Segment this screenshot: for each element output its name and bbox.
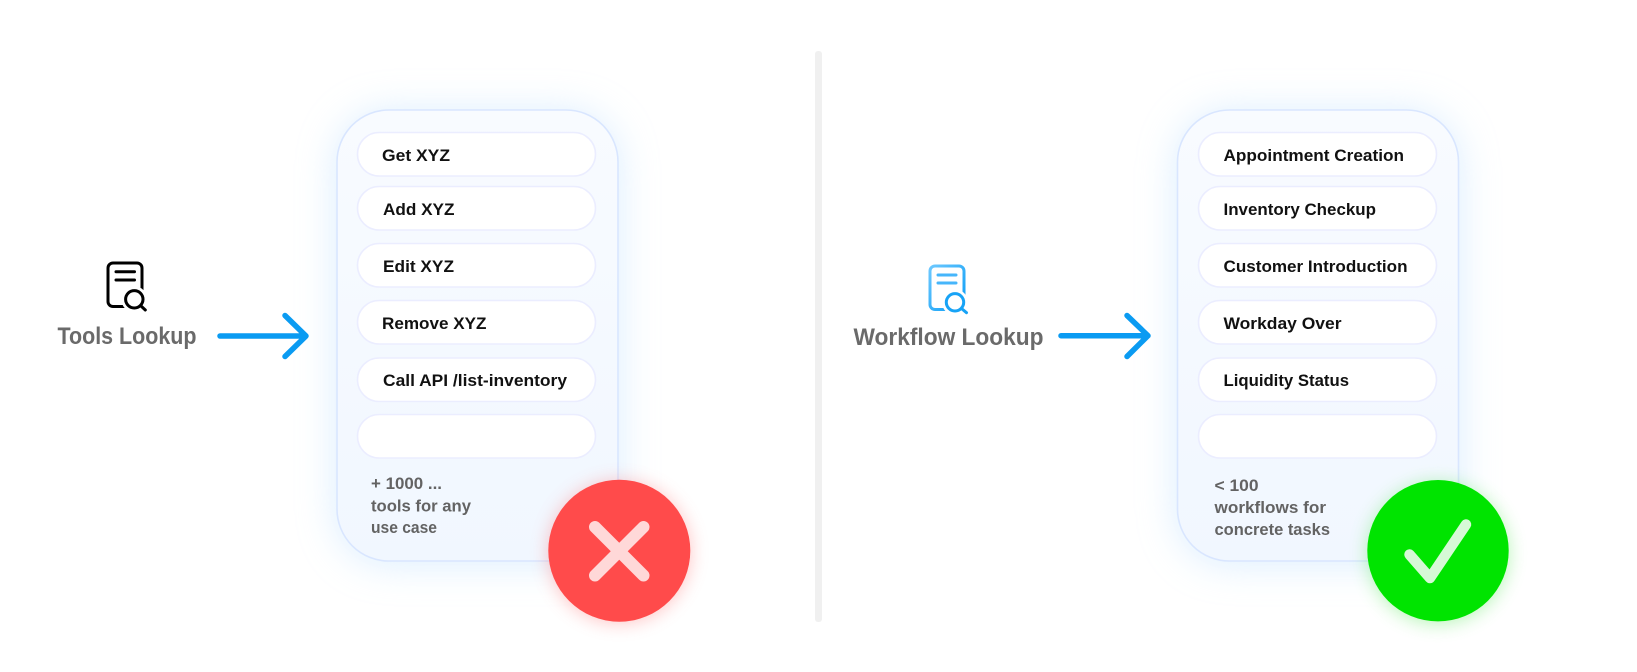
pill: Add XYZ (358, 186, 596, 230)
pill: Add XYZ: Add XYZ (383, 200, 454, 219)
caption: tools count: tools for any (371, 496, 472, 516)
pill: Call API (358, 358, 596, 402)
icon: workflow lookup document (930, 266, 968, 315)
pill: Inventory Checkup: Inventory Checkup (1224, 200, 1376, 219)
pill: Appointment Creation: Appointment Creation (1224, 146, 1404, 165)
workflow panel glow (1178, 112, 1458, 563)
tools panel glow (337, 112, 618, 563)
pill: Call API: Call API /list-inventory (383, 371, 568, 390)
badge: green check (1367, 480, 1509, 624)
pill: Inventory Checkup (1198, 186, 1436, 230)
pill: Remove XYZ: Remove XYZ (382, 314, 486, 333)
caption: tools count: + 1000 ... (371, 474, 442, 493)
pill: Customer Introduction: Customer Introduction (1224, 257, 1408, 276)
arrow: workflow (1061, 316, 1148, 356)
pill: empty (358, 414, 596, 458)
badge: red cross (548, 480, 690, 623)
pill: Edit XYZ (358, 244, 596, 287)
caption: workflow count: workflows for (1213, 498, 1326, 517)
arrow: tools (220, 316, 306, 356)
pill: Workday Over (1198, 300, 1436, 344)
panel: tools lookup (337, 110, 618, 563)
divider (815, 51, 822, 622)
heading: Tools Lookup: Tools Lookup (58, 323, 196, 350)
pill: Appointment Creation (1198, 132, 1436, 176)
heading: Workflow Lookup: Workflow Lookup (854, 324, 1044, 351)
pill: Edit XYZ: Edit XYZ (383, 257, 454, 276)
caption: tools count (371, 474, 472, 537)
workflow panel card (1178, 110, 1458, 561)
tools panel card (337, 110, 618, 561)
caption: workflow count (1213, 476, 1330, 539)
caption: workflow count: concrete tasks (1214, 520, 1330, 539)
pill: Liquidity Status: Liquidity Status (1224, 371, 1349, 390)
pill: Get XYZ: Get XYZ (382, 146, 450, 165)
panel: workflow lookup (1178, 110, 1458, 563)
pill: Liquidity Status (1198, 358, 1436, 402)
icon: tools lookup document (108, 263, 147, 312)
pill: Remove XYZ (358, 300, 596, 344)
pill: Workday Over: Workday Over (1224, 314, 1342, 333)
pill: Get XYZ (358, 132, 596, 176)
caption: workflow count: < 100 (1214, 476, 1258, 495)
pill: empty (1198, 414, 1436, 458)
pill: Customer Introduction (1198, 244, 1436, 287)
caption: tools count: use case (371, 518, 437, 537)
